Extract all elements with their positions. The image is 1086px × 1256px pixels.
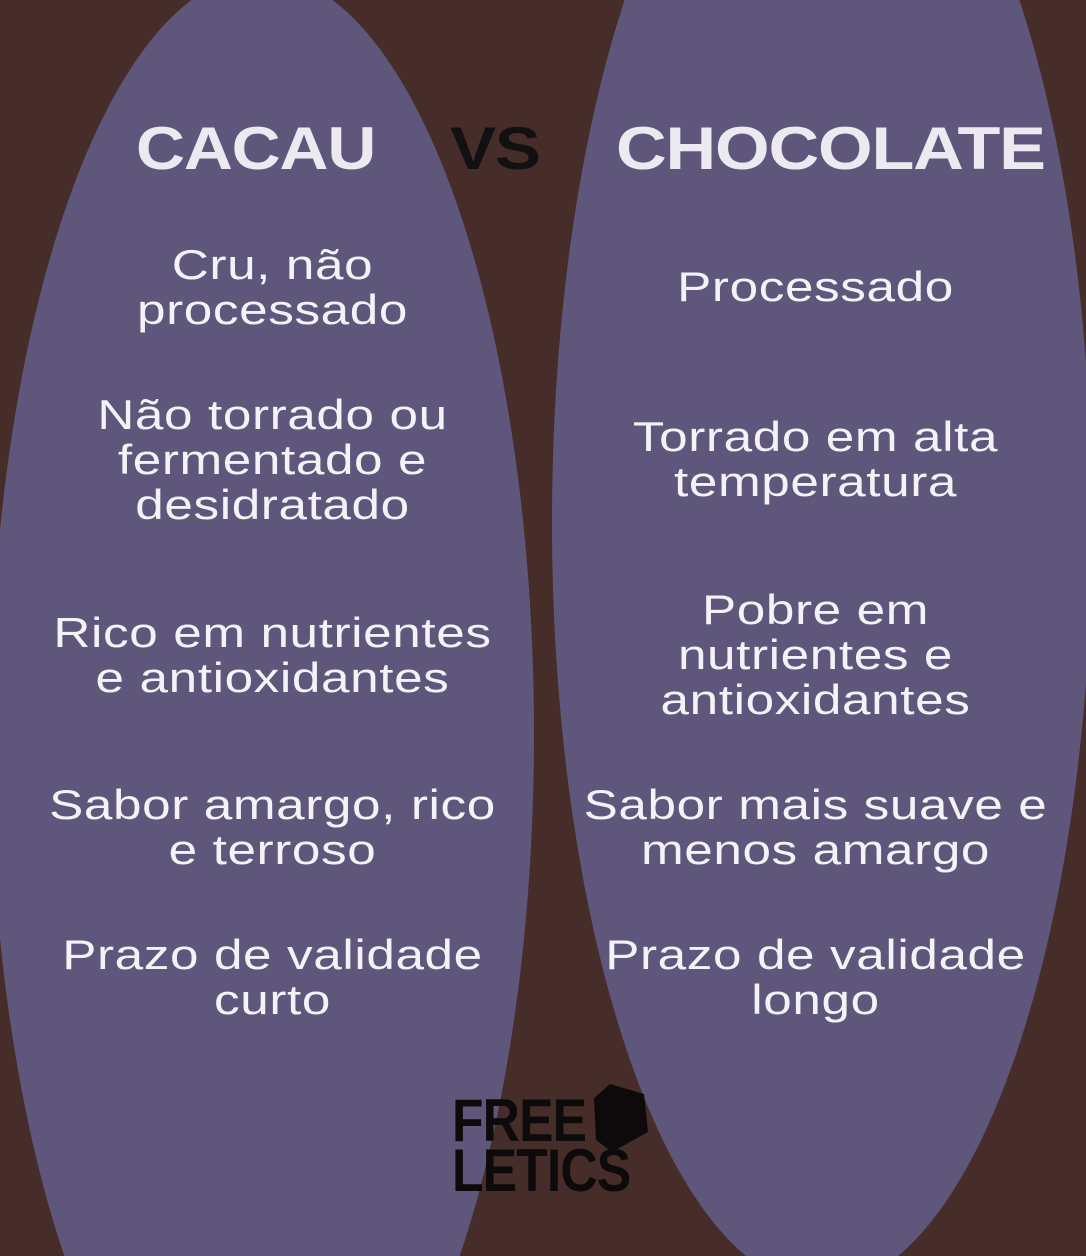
- item: e terroso: [169, 826, 376, 873]
- item: temperatura: [674, 458, 957, 505]
- item: Não torrado ou: [97, 391, 448, 438]
- logo: freeletics: LETICS: [452, 1137, 630, 1204]
- item: desidratado: [135, 481, 410, 528]
- item: fermentado e: [118, 436, 427, 483]
- item: processado: [137, 286, 408, 333]
- item: Torrado em alta: [633, 413, 998, 460]
- item: [49, 781, 496, 873]
- title: chocolate: CHOCOLATE: [616, 115, 1045, 182]
- item: [633, 413, 998, 505]
- item: Rico em nutrientes: [53, 609, 492, 656]
- item: Prazo de validade: [605, 931, 1026, 978]
- item: longo: [751, 976, 880, 1023]
- item: Pobre em: [702, 586, 929, 633]
- item: [605, 931, 1026, 1023]
- item: antioxidantes: [661, 676, 970, 723]
- item: [97, 391, 448, 528]
- icon: pentagon: [594, 1084, 648, 1150]
- logo: freeletics: FREE: [452, 1087, 586, 1154]
- item: [584, 781, 1047, 873]
- item: menos amargo: [641, 826, 990, 873]
- item: Sabor amargo, rico: [49, 781, 496, 828]
- item: Processado: [677, 263, 954, 310]
- left column text: [49, 241, 496, 1023]
- title: cacau: CACAU: [136, 115, 375, 182]
- logo: freeletics: [452, 1084, 648, 1204]
- item: nutrientes e: [678, 631, 953, 678]
- item: [137, 241, 408, 333]
- item: e antioxidantes: [96, 654, 449, 701]
- item: [661, 586, 970, 723]
- item: Cru, não: [172, 241, 373, 288]
- title: vs: VS: [450, 115, 540, 182]
- right column text: [584, 263, 1047, 1023]
- item: [62, 931, 483, 1023]
- item: curto: [214, 976, 331, 1023]
- item: [53, 609, 492, 701]
- item: Prazo de validade: [62, 931, 483, 978]
- item: Sabor mais suave e: [584, 781, 1047, 828]
